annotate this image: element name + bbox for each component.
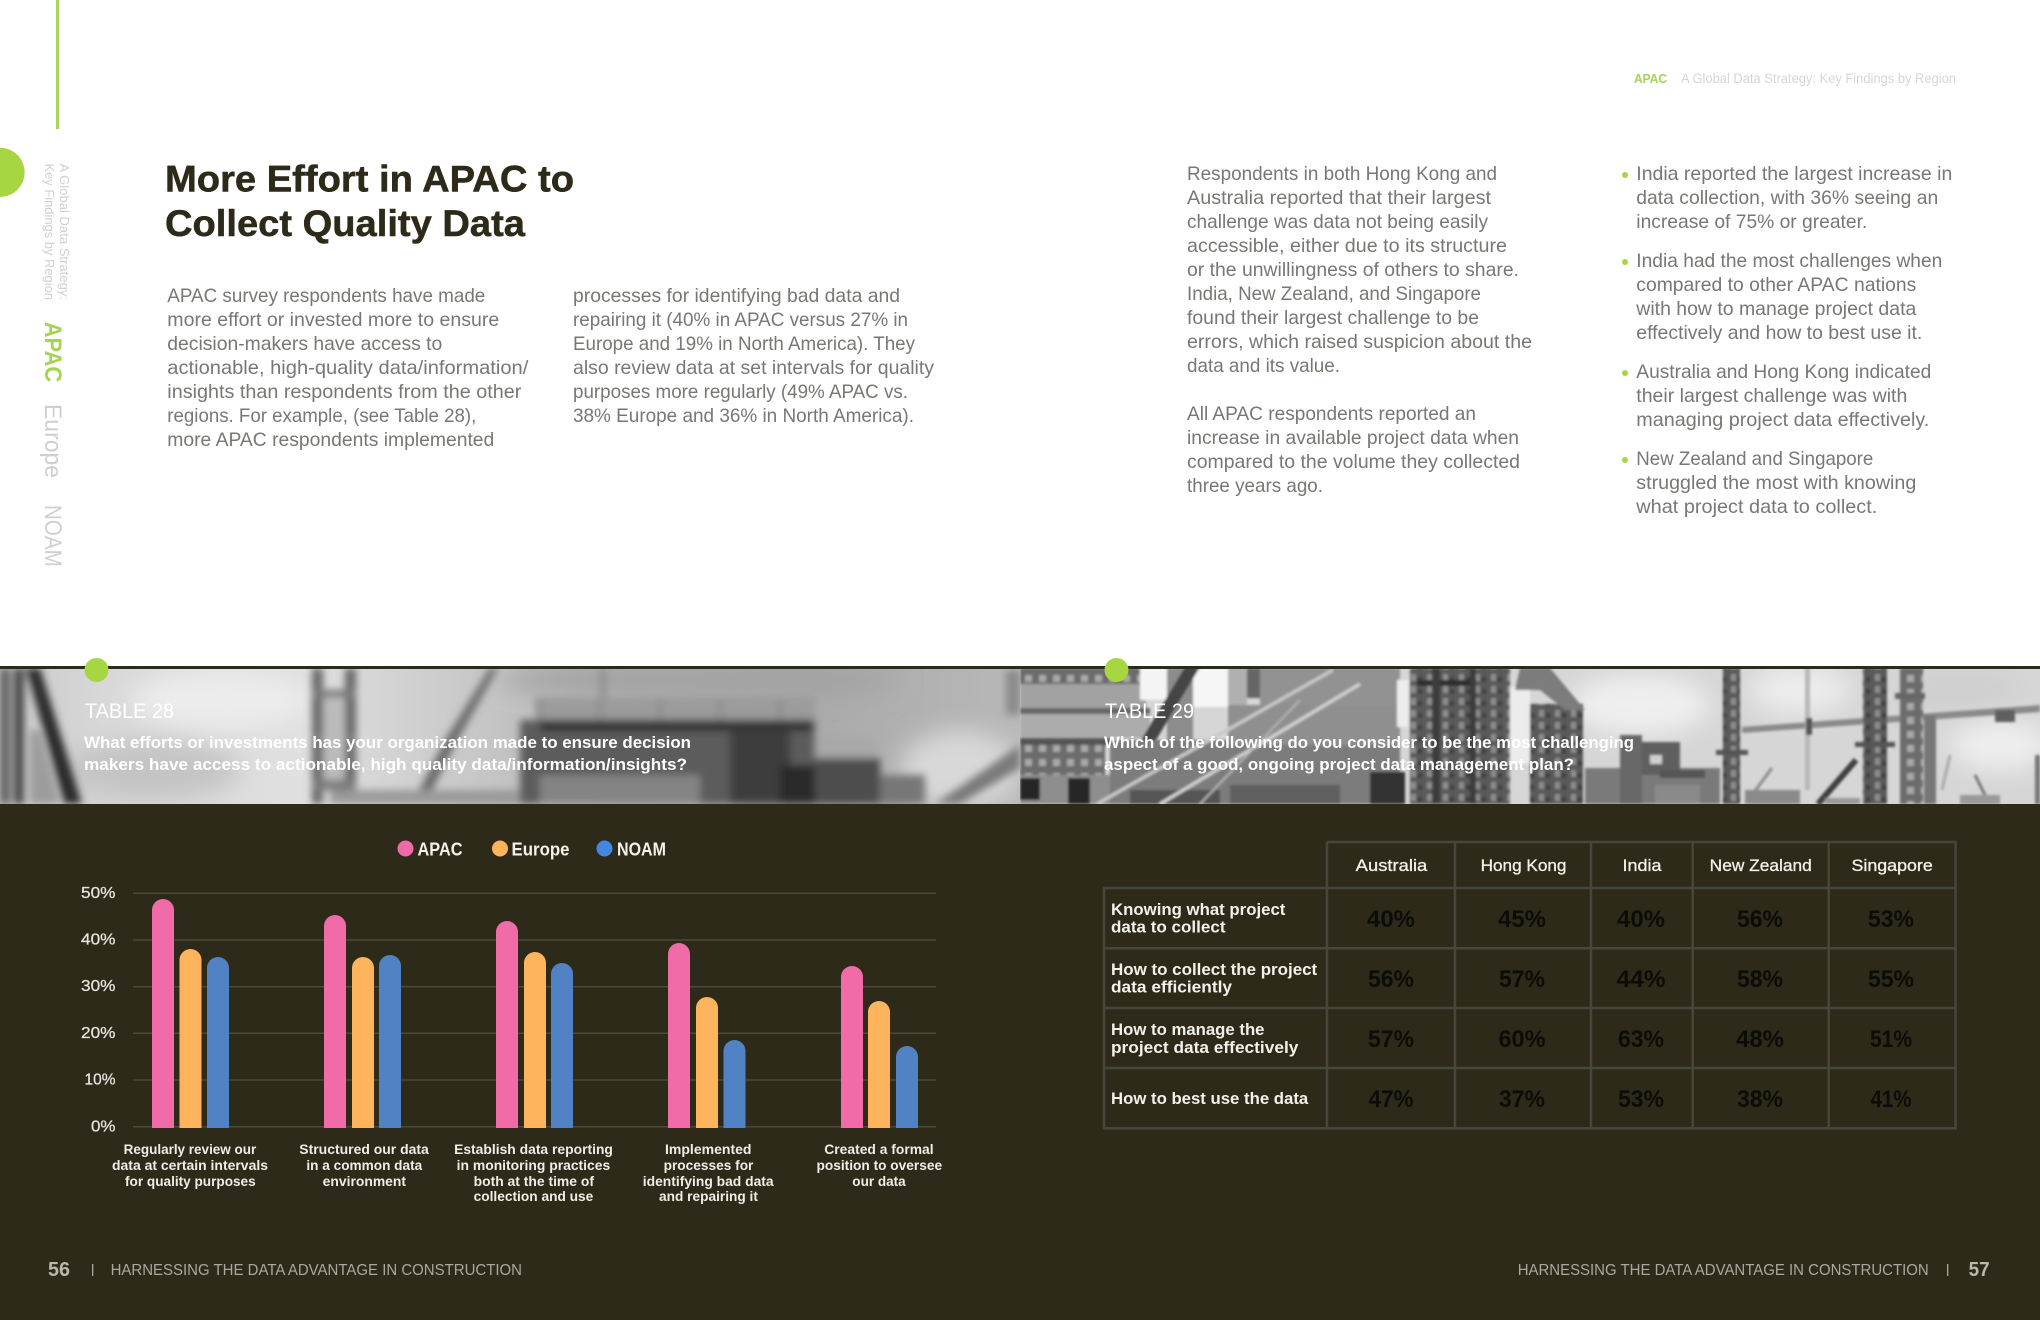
y axis labels [81,885,116,1136]
low buildings [1585,768,1720,804]
intro text column 1 [167,285,529,451]
table 29 question: aspect of a good, ongoing project data management plan? [1104,755,1574,774]
intro text column 2: also review data at set intervals for quality [573,357,934,379]
towers and crane [1742,705,2040,733]
category label 3 [454,1142,613,1204]
intro text column 2: repairing it (40% in APAC versus 27% in [573,309,908,331]
row values: collecting efficiently: 44% [1616,966,1666,993]
running header: APAC [1634,71,1668,86]
footer right: 57 [1969,1259,1990,1281]
row values: knowing what to collect: 53% [1868,906,1914,933]
column headers: Singapore [1852,856,1933,875]
category label 3: Establish data reporting [454,1142,613,1157]
row labels: data efficiently [1111,978,1233,996]
bullet: India increase: increase of 75% or greater. [1636,211,1867,233]
white diagonal braces [1160,684,1360,804]
intro text column 2: Europe and 19% in North America). They [573,333,915,355]
row values: knowing what to collect [1367,906,1914,933]
footer right [1518,1259,1990,1281]
bullet: India increase: data collection, with 36% seeing an [1636,187,1938,209]
data table [1104,842,1956,1128]
category label 5 [816,1142,943,1189]
row values: collecting efficiently [1368,966,1914,993]
category label 1: for quality purposes [125,1174,256,1189]
intro text column 2 [573,285,934,427]
category label 1: Regularly review our [124,1142,257,1157]
intro text column 2: processes for identifying bad data and [573,285,900,307]
bullet: New Zealand and Singapore [1622,448,1916,518]
title: Collect Quality Data [165,203,525,244]
category label 5: our data [852,1174,906,1189]
bullet: Australia and Hong Kong: their largest challenge was with [1636,385,1907,407]
y axis labels: 40% [81,932,116,948]
intro text column 1: decision-makers have access to [167,333,442,355]
data volume paragraph: All APAC respondents reported an [1187,403,1476,425]
bars: implemented processes [668,943,746,1128]
challenges paragraph: Respondents in both Hong Kong and [1187,163,1497,185]
bullet: Australia and Hong Kong [1622,361,1931,431]
bullet: New Zealand and Singapore: New Zealand and Singapore [1636,448,1873,470]
row labels [1111,900,1318,1108]
row values: managing effectively: 63% [1618,1026,1664,1053]
dark lower panel [0,804,2040,1320]
bars: regularly review [152,899,229,1128]
bars: formal position [841,966,918,1128]
intro text column 2: 38% Europe and 36% in North America). [573,405,914,427]
category label 2: in a common data [306,1158,423,1173]
row values: managing effectively: 48% [1736,1026,1784,1053]
category label 1: data at certain intervals [112,1158,268,1173]
intro text column 1: APAC survey respondents have made [167,285,485,307]
sidebar tab Europe: Europe [39,404,66,478]
y axis labels: 20% [81,1025,116,1042]
middle mass [1110,740,1400,804]
sidebar report title: Key Findings by Region [42,164,57,300]
bullet: India increase [1622,163,1952,233]
category label 4: identifying bad data [643,1174,774,1189]
intro text column 1: more APAC respondents implemented [167,429,494,451]
chart legend [398,840,666,860]
challenges paragraph: accessible, either due to its structure [1187,235,1507,257]
column headers [1356,856,1933,875]
row values: best use [1368,1086,1912,1113]
table 29 question [1104,733,1634,774]
row values: knowing what to collect: 40% [1367,906,1415,933]
row labels: Knowing what project [1111,900,1286,919]
column headers: Hong Kong [1481,856,1566,875]
bars: data reporting [496,921,573,1128]
row values: collecting efficiently: 58% [1737,966,1783,993]
y axis labels: 50% [81,885,116,902]
row values: collecting efficiently: 56% [1368,966,1414,993]
table 28 question: makers have access to actionable, high quality data/information/insights? [84,755,687,774]
column headers: Australia [1356,856,1428,875]
row labels: project data effectively [1111,1038,1299,1057]
category label 4: and repairing it [659,1189,758,1204]
intro text column 2: purposes more regularly (49% APAC vs. [573,381,908,403]
category label 5: position to oversee [816,1158,943,1173]
challenges paragraph: data and its value. [1187,355,1340,377]
table 28 question: What efforts or investments has your organization made to ensure decision [84,733,691,752]
challenges paragraph: errors, which raised suspicion about the [1187,331,1532,353]
row values: managing effectively: 57% [1368,1026,1414,1053]
footer left [48,1259,522,1281]
running header: A Global Data Strategy: Key Findings by Region [1681,71,1956,86]
table 28 number: TABLE 28 [85,700,174,723]
category label 2: Structured our data [299,1142,429,1157]
sidebar tab NOAM: NOAM [39,505,66,567]
category label 2: environment [323,1174,407,1189]
bullet: India challenges: compared to other APAC nations [1636,274,1917,296]
row values: best use: 37% [1499,1086,1545,1113]
photo band: table 28 [0,662,1020,810]
row labels: data to collect [1111,918,1226,937]
challenges paragraph [1187,163,1532,377]
table 29 heading [1104,700,1634,774]
row labels: How to best use the data [1111,1089,1309,1108]
row values: collecting efficiently: 55% [1868,966,1914,993]
y axis labels: 0% [91,1118,116,1136]
sidebar tab APAC: APAC [39,322,66,382]
column headers: India [1622,856,1662,875]
left building [1020,669,1142,686]
row values: collecting efficiently: 57% [1499,966,1545,993]
bullet: India challenges: India had the most challenges when [1636,250,1942,272]
table 29 number: TABLE 29 [1105,700,1194,723]
footer left: HARNESSING THE DATA ADVANTAGE IN CONSTRUCTION [111,1262,522,1279]
challenges paragraph: found their largest challenge to be [1187,307,1479,329]
table grid [1104,842,1956,1128]
row labels: How to manage the [1111,1020,1264,1039]
central structure [1397,680,1408,727]
row values: managing effectively: 60% [1498,1026,1546,1053]
accent dot: table 28 [84,658,108,682]
intro text column 1: actionable, high-quality data/information/ [167,357,529,379]
row values: knowing what to collect: 56% [1737,906,1783,933]
sidebar accent line [56,0,59,129]
sidebar report title [42,164,72,300]
table 28 heading [84,700,691,774]
footer right: HARNESSING THE DATA ADVANTAGE IN CONSTRUCTION [1518,1262,1929,1279]
row values: managing effectively [1368,1026,1912,1053]
sidebar tab circle [0,148,25,197]
chart legend: Europe [512,840,570,860]
bullet: India increase: India reported the largest increase in [1636,163,1952,185]
category label 1 [112,1142,268,1189]
y axis labels: 30% [81,978,116,995]
row values: managing effectively: 51% [1870,1026,1912,1053]
bullet: Australia and Hong Kong: Australia and Hong Kong indicated [1636,361,1931,383]
bullet: New Zealand and Singapore: struggled the most with knowing [1636,472,1916,494]
bullet: India challenges: effectively and how to best use it. [1636,322,1922,344]
chart legend: APAC [418,840,462,860]
y axis labels: 10% [84,1072,116,1088]
category label 3: both at the time of [474,1174,595,1189]
category label 4: Implemented [665,1142,752,1157]
bullet: New Zealand and Singapore: what project data to collect. [1635,496,1877,518]
bullet: India challenges [1622,250,1942,344]
table 29 question: Which of the following do you consider to be the most challenging [1104,733,1634,752]
top rule [0,666,2040,669]
table 28 question [84,733,691,774]
challenges paragraph: India, New Zealand, and Singapore [1187,283,1481,305]
accent dot: table 29 [1104,658,1128,682]
bullet: Australia and Hong Kong: managing project data effectively. [1636,409,1929,431]
column headers: New Zealand [1710,856,1812,875]
title [165,158,574,244]
intro text column 1: insights than respondents from the other [167,381,522,403]
category label 3: in monitoring practices [457,1158,610,1173]
challenges paragraph: or the unwillingness of others to share. [1187,259,1519,281]
category label 4: processes for [664,1158,754,1173]
row labels: How to collect the project [1111,960,1318,979]
category label 5: Created a formal [824,1142,934,1157]
row values: best use: 38% [1737,1086,1783,1113]
bullet list [1622,163,1952,518]
data volume paragraph: increase in available project data when [1187,427,1519,449]
row values: best use: 47% [1368,1086,1414,1113]
row values: knowing what to collect: 45% [1498,906,1546,933]
category label 4 [643,1142,774,1204]
bullet: India challenges: with how to manage project data [1635,298,1916,320]
data volume paragraph: compared to the volume they collected [1187,451,1520,473]
row values: best use: 53% [1618,1086,1664,1113]
data volume paragraph: three years ago. [1187,475,1323,497]
data volume paragraph [1187,403,1520,497]
footer left: 56 [48,1259,70,1281]
bar chart [81,840,943,1204]
row values: best use: 41% [1870,1086,1912,1113]
category label 3: collection and use [474,1189,594,1204]
row values: knowing what to collect: 40% [1617,906,1665,933]
intro text column 1: more effort or invested more to ensure [167,309,499,331]
challenges paragraph: challenge was data not being easily [1187,211,1488,233]
category label 2 [299,1142,429,1189]
challenges paragraph: Australia reported that their largest [1187,187,1492,209]
chart legend: NOAM [617,840,666,860]
sidebar report title: A Global Data Strategy: [57,164,72,300]
sidebar navigation [39,164,72,567]
intro text column 1: regions. For example, (see Table 28), [167,405,476,427]
bars: structured data [324,915,401,1128]
title: More Effort in APAC to [165,158,574,200]
photo band: table 29 [1020,665,2040,804]
